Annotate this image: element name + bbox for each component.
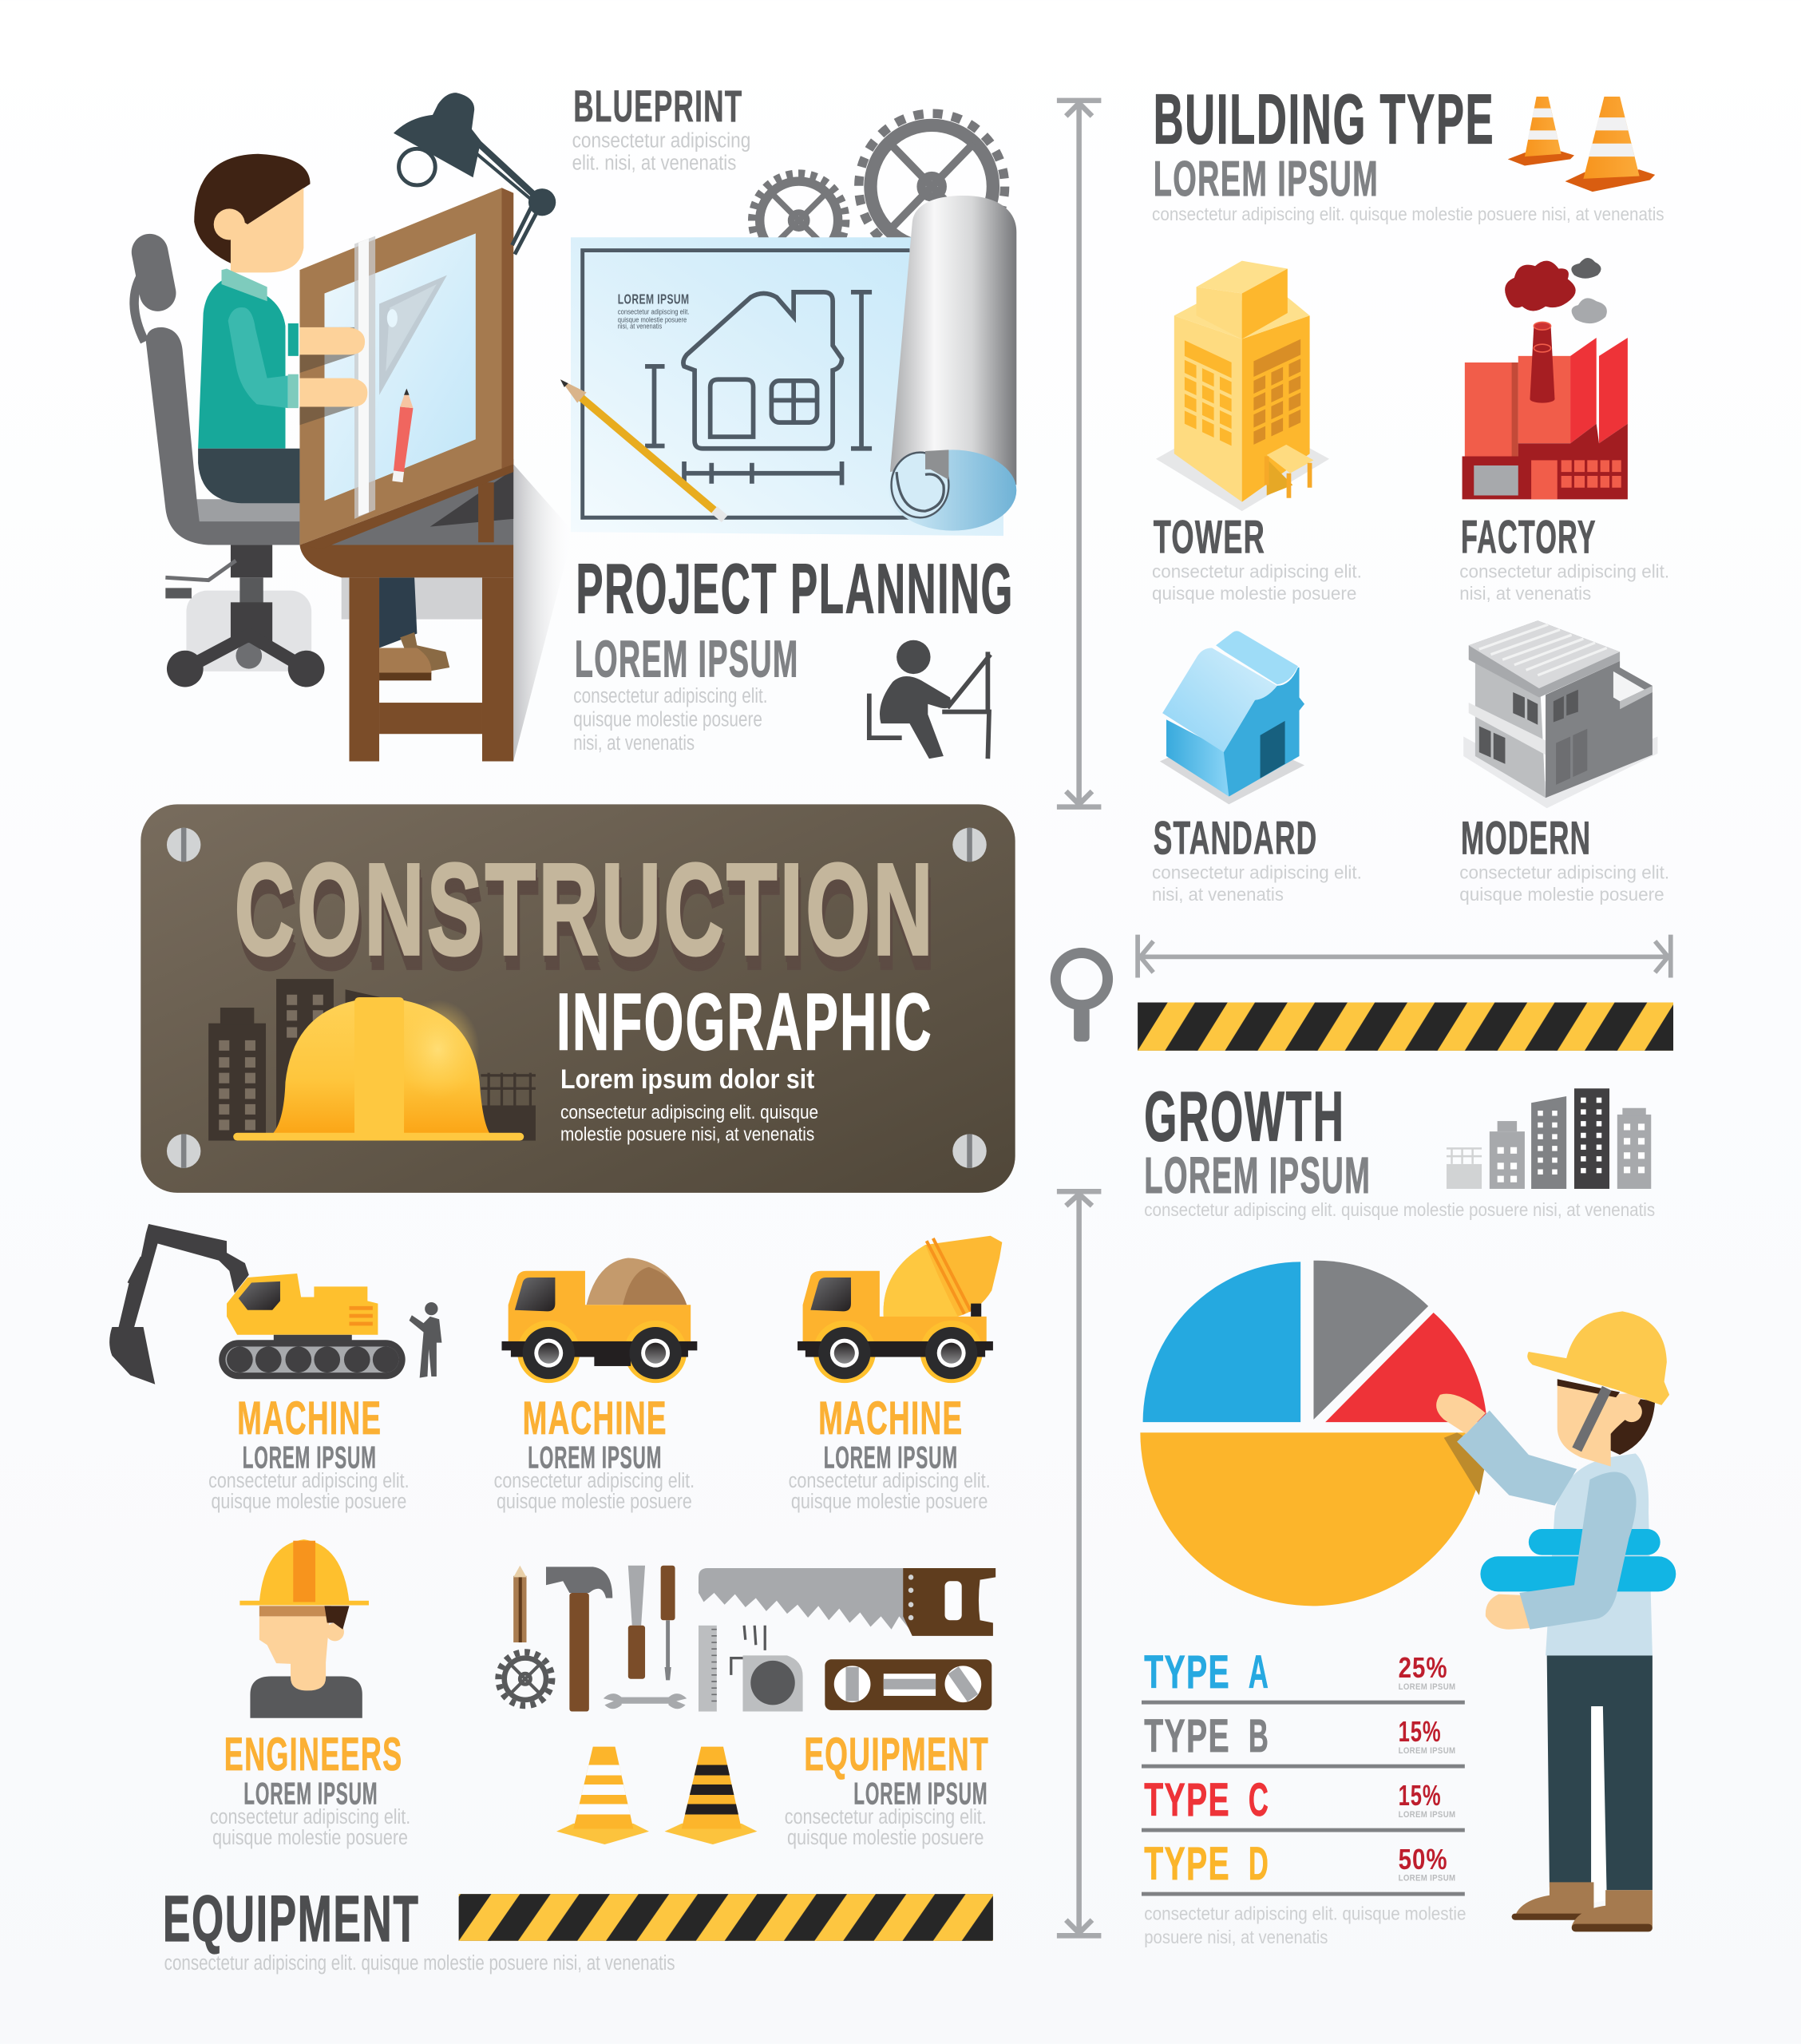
icon: cement mixer truck: [798, 1236, 1002, 1383]
hammer: [546, 1567, 612, 1712]
worker legs: [1512, 1655, 1653, 1931]
label: modern: [1459, 812, 1669, 905]
hazard stripe: upper: [1138, 1003, 1673, 1051]
equipment label: consectetur adipiscing elit.: [785, 1804, 987, 1828]
spirit level: [825, 1659, 992, 1710]
legend note: consectetur adipiscing elit. quisque molestie: [1144, 1903, 1466, 1924]
plate screws: [167, 828, 987, 1168]
legend: type C: TYPE: [1144, 1774, 1230, 1826]
footer heading: equipment: [163, 1883, 675, 1975]
wrench: [604, 1693, 687, 1709]
person seated: [194, 154, 449, 680]
machine label 2: quisque molestie posuere: [497, 1489, 692, 1513]
icon: dump truck: [501, 1258, 697, 1383]
heading: blueprint: consectetur adipiscing: [572, 129, 750, 153]
icons: hand tools: [498, 1566, 995, 1712]
blueprint rolls: [1480, 1529, 1676, 1591]
legend: type A: 25%: [1399, 1651, 1448, 1684]
worker torso: [1546, 1453, 1653, 1655]
house plan drawing: [645, 292, 872, 485]
legend: type D: TYPE: [1144, 1838, 1230, 1890]
legend: type B: 15%: [1399, 1715, 1441, 1748]
small worker silhouette: [410, 1302, 441, 1378]
legend: type B: B: [1249, 1710, 1269, 1762]
heading: growth: GROWTH: [1144, 1077, 1345, 1156]
label: factory: consectetur adipiscing elit.: [1459, 561, 1669, 581]
label: factory: [1459, 511, 1669, 604]
arrow: horizontal dimension: [1138, 935, 1671, 977]
blueprint sheet: consectetur adipiscing elit.: [618, 308, 690, 316]
title plate: construction infographic: [141, 804, 1015, 1193]
engineers label: consectetur adipiscing elit.: [210, 1804, 410, 1828]
blueprint sheet: [560, 196, 1016, 536]
icon: standard house: [1160, 631, 1304, 804]
legend: type A: [1142, 1646, 1465, 1705]
icon: city skyline: [1447, 1088, 1651, 1189]
engineers label: LOREM IPSUM: [243, 1777, 378, 1811]
heading: building type: consectetur adipiscing elit. quisque molestie posuere nisi, at venenatis: [1152, 204, 1664, 224]
title word: construction: [235, 836, 938, 996]
label: tower: consectetur adipiscing elit.: [1152, 561, 1362, 581]
cone black stripes: [665, 1747, 757, 1844]
worker head and hard hat: [1527, 1311, 1669, 1467]
drafting table: [299, 188, 513, 762]
label: standard: [1152, 812, 1362, 905]
heading: building type: [1152, 80, 1664, 224]
machine label 1: consectetur adipiscing elit.: [208, 1468, 410, 1492]
machine label 2: MACHINE: [523, 1392, 667, 1444]
pencil: [560, 379, 725, 519]
machine label 3: quisque molestie posuere: [791, 1489, 988, 1513]
heading: growth: consectetur adipiscing elit. quisque molestie posuere nisi, at venenatis: [1144, 1199, 1655, 1220]
heading: building type: BUILDING TYPE: [1154, 80, 1494, 159]
tape measure: [731, 1655, 803, 1712]
icon: tower building: [1156, 261, 1329, 511]
machine label 1: LOREM IPSUM: [243, 1440, 377, 1475]
legend: type A: TYPE: [1144, 1646, 1230, 1698]
heading: project planning: [573, 549, 1014, 755]
title word: construction: CONSTRUCTION: [235, 836, 936, 982]
ruler: [699, 1626, 717, 1712]
engineers label: quisque molestie posuere: [212, 1825, 408, 1849]
heading: project planning: PROJECT PLANNING: [576, 549, 1014, 628]
blueprint sheet: LOREM IPSUM: [618, 291, 690, 307]
screwdriver: [661, 1566, 675, 1680]
paper roll: [889, 196, 1016, 531]
legend: type A: LOREM IPSUM: [1399, 1682, 1455, 1692]
machine label 2: LOREM IPSUM: [528, 1440, 662, 1475]
legend: type D: LOREM IPSUM: [1399, 1874, 1455, 1884]
heading: blueprint: elit. nisi, at venenatis: [572, 150, 736, 174]
machine label 1: quisque molestie posuere: [211, 1489, 406, 1513]
plate subtitle: [560, 1064, 818, 1146]
machine label 3: LOREM IPSUM: [824, 1440, 958, 1475]
label: modern: quisque molestie posuere: [1459, 884, 1664, 905]
chisel: [628, 1566, 645, 1679]
label: modern: MODERN: [1461, 812, 1591, 864]
icon: magnifier: [1055, 953, 1108, 1041]
blueprint sheet: nisi, at venenatis: [618, 323, 663, 331]
legend: type B: [1142, 1710, 1465, 1769]
icon: gears: [752, 113, 1005, 267]
legend: type A: A: [1249, 1646, 1269, 1698]
title word: construction: CONSTRUCTION: [237, 850, 938, 996]
legend: type D: 50%: [1399, 1843, 1448, 1876]
label: standard: STANDARD: [1154, 812, 1317, 864]
label: standard: consectetur adipiscing elit.: [1152, 862, 1362, 882]
label: tower: quisque molestie posuere: [1152, 583, 1356, 604]
plate subtitle: molestie posuere nisi, at venenatis: [560, 1125, 814, 1146]
legend: type C: C: [1249, 1774, 1269, 1826]
worker hand lower: [1486, 1594, 1530, 1630]
heading: growth: [1144, 1077, 1655, 1220]
worker pointing at chart: [1436, 1311, 1676, 1931]
skyline silhouette: [208, 979, 536, 1141]
equipment label: LOREM IPSUM: [853, 1777, 988, 1811]
icon: engineer head: [239, 1539, 369, 1718]
arrow: vertical dimension, building type: [1057, 101, 1101, 807]
heading: blueprint: [572, 81, 750, 174]
label: standard: nisi, at venenatis: [1152, 884, 1284, 905]
pencil on table: [392, 389, 413, 482]
footer heading: equipment: EQUIPMENT: [163, 1883, 420, 1955]
label: factory: FACTORY: [1461, 511, 1597, 563]
title word: infographic: INFOGRAPHIC: [556, 976, 933, 1067]
icon: excavator: [109, 1224, 441, 1384]
heading: project planning: nisi, at venenatis: [573, 731, 695, 755]
machine label 1: [208, 1392, 410, 1513]
label: factory: nisi, at venenatis: [1459, 583, 1591, 604]
machine label 2: [494, 1392, 695, 1513]
hand saw: [699, 1568, 995, 1636]
icon: yellow traffic cones: [556, 1747, 757, 1844]
title word: construction: CONSTRUCTION: [236, 842, 937, 988]
worker lower arm: [1519, 1472, 1637, 1630]
heading: growth: LOREM IPSUM: [1144, 1147, 1371, 1204]
icon: orange traffic cones: [1508, 97, 1655, 192]
engineers label: ENGINEERS: [224, 1729, 402, 1781]
equipment label: quisque molestie posuere: [787, 1825, 984, 1849]
icon: person at drawing board: [869, 640, 991, 759]
office chair: [129, 231, 324, 687]
heading: project planning: LOREM IPSUM: [575, 629, 799, 687]
legend: type C: [1142, 1774, 1465, 1832]
equipment label: [785, 1729, 989, 1849]
footer heading: equipment: consectetur adipiscing elit. quisque molestie posuere nisi, at venenatis: [164, 1951, 675, 1975]
pencil tool: [513, 1566, 526, 1642]
heading: project planning: quisque molestie posuere: [573, 707, 762, 731]
plate subtitle: Lorem ipsum dolor sit: [560, 1064, 814, 1095]
cone white stripes: [556, 1747, 649, 1844]
label: modern: consectetur adipiscing elit.: [1459, 862, 1669, 882]
heading: building type: LOREM IPSUM: [1154, 152, 1379, 207]
hard hat: [233, 997, 524, 1141]
pie chart: [1140, 1261, 1488, 1606]
machine label 1: MACHINE: [237, 1392, 382, 1444]
legend: type C: 15%: [1399, 1779, 1441, 1812]
heading: blueprint: BLUEPRINT: [573, 81, 742, 131]
icon: modern house: [1463, 620, 1657, 808]
desk lamp: [394, 93, 556, 255]
machine label 2: consectetur adipiscing elit.: [494, 1468, 695, 1492]
equipment label: EQUIPMENT: [804, 1729, 989, 1781]
nails: [744, 1626, 765, 1650]
icon: factory: [1463, 258, 1628, 499]
legend note: [1144, 1903, 1466, 1947]
legend note: posuere nisi, at venenatis: [1144, 1927, 1328, 1947]
worker raised arm: [1457, 1410, 1577, 1506]
hazard stripe: lower: [459, 1894, 993, 1941]
illustration: drafter at drawing table: [129, 93, 573, 762]
legend: type B: LOREM IPSUM: [1399, 1746, 1455, 1756]
engineers label: [210, 1729, 410, 1849]
legend: type D: D: [1249, 1838, 1269, 1890]
label: tower: [1152, 511, 1362, 604]
machine label 3: [789, 1392, 991, 1513]
small gear tool: [498, 1652, 552, 1705]
arrow: vertical dimension, growth: [1057, 1191, 1101, 1935]
label: tower: TOWER: [1154, 511, 1265, 563]
legend: type C: LOREM IPSUM: [1399, 1810, 1455, 1820]
heading: project planning: consectetur adipiscing elit.: [573, 683, 767, 707]
legend: type B: TYPE: [1144, 1710, 1230, 1762]
legend: type D: [1142, 1838, 1465, 1896]
plate subtitle: consectetur adipiscing elit. quisque: [560, 1103, 818, 1123]
machine label 3: MACHINE: [818, 1392, 963, 1444]
blueprint sheet: quisque molestie posuere: [618, 315, 687, 323]
machine label 3: consectetur adipiscing elit.: [789, 1468, 991, 1492]
